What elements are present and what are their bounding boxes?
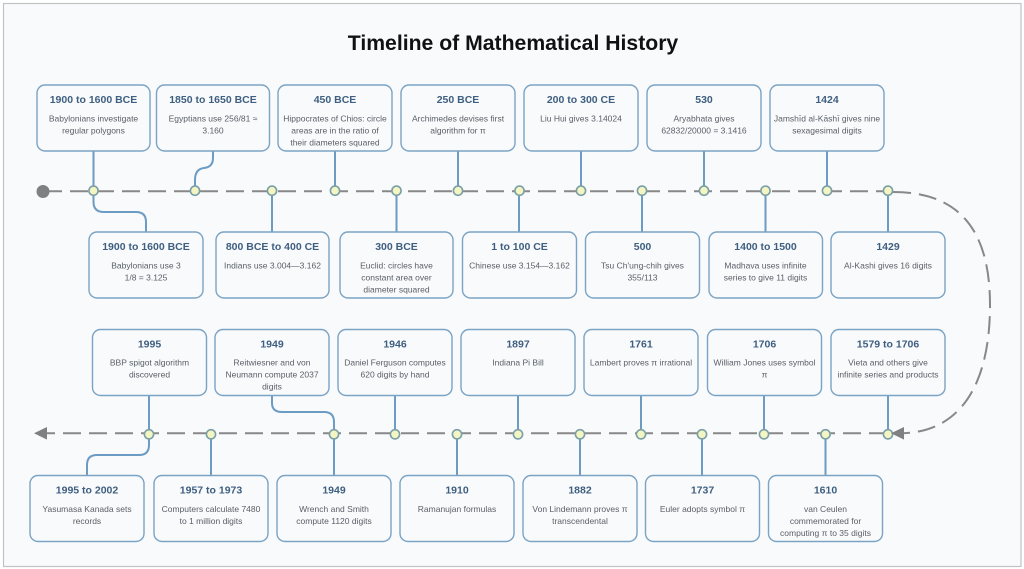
card: 1900 to 1600 BCE 3.125: 1900 to 1600 BCE [102, 241, 190, 253]
card: 800 BCE to 400 CE: 800 BCE to 400 CE [226, 241, 319, 253]
card: 1949 Reitwiesner: 1949 [260, 338, 284, 350]
card: 200 to 300 CE: Liu Hui gives 3.14024 [540, 114, 622, 124]
card: 1882: Von Lindemann proves π [532, 504, 628, 514]
card: 300 BCE: diameter squared [363, 284, 430, 294]
card: 450 BCE: areas are in the ratio of [291, 126, 379, 136]
card: 200 to 300 CE [524, 85, 638, 151]
card: 1610: computing π to 35 digits [780, 528, 871, 538]
card: 450 BCE: their diameters squared [290, 138, 380, 148]
card: 1949 Reitwiesner: Reitwiesner and von [233, 358, 311, 368]
card: 500: 355/113 [627, 272, 658, 282]
card: 1579 to 1706: Vieta and others give [848, 358, 928, 368]
card: 1949 Reitwiesner: digits [262, 382, 282, 392]
card: 450 BCE: Hippocrates of Chios: circle [283, 114, 387, 124]
card: 1429: 1429 [876, 241, 900, 253]
card: 530 [647, 85, 761, 151]
card: 1900 to 1600 BCE polygons: Babylonians investigate [49, 114, 138, 124]
card: 1995 BBP [92, 330, 206, 396]
card: 1910: 1910 [445, 484, 469, 496]
card: 1995 BBP: 1995 [138, 338, 161, 350]
card: 1400 to 1500: 1400 to 1500 [734, 241, 797, 253]
card: 250 BCE [401, 85, 515, 151]
card: 500: Tsu Ch'ung-chih gives [601, 260, 684, 270]
card: 1610 [768, 476, 882, 542]
card: 1946: Daniel Ferguson computes [344, 358, 446, 368]
card: 1900 to 1600 BCE 3.125: 1/8 = 3.125 [125, 272, 168, 282]
card: 1429 [831, 232, 945, 298]
card: 300 BCE: 300 BCE [375, 241, 418, 253]
card: 1429: Al-Kashi gives 16 digits [844, 260, 932, 270]
card: 1900 to 1600 BCE polygons: regular polygons [62, 126, 125, 136]
card: 1706: 1706 [753, 338, 776, 350]
card: 250 BCE: algorithm for π [430, 126, 486, 136]
card: 1900 to 1600 BCE polygons: 1900 to 1600 BCE [50, 94, 137, 106]
card: 1706: William Jones uses symbol [713, 358, 816, 368]
curved turn line [893, 192, 990, 433]
start marker [36, 185, 50, 198]
card: 200 to 300 CE: 200 to 300 CE [547, 94, 615, 106]
card: 530: 62832/20000 = 3.1416 [661, 126, 747, 136]
card: 1949 Reitwiesner [215, 330, 329, 396]
card: 800 BCE to 400 CE [216, 232, 329, 298]
card: 1761 [584, 330, 698, 396]
card: 1850 to 1650 BCE [156, 85, 270, 151]
card: 1995 BBP: BBP spigot algorithm [110, 358, 189, 368]
card: 300 BCE: Euclid: circles have [360, 260, 433, 270]
card: 1900 to 1600 BCE 3.125 [89, 232, 203, 298]
card: 1897: Indiana Pi Bill [492, 358, 544, 368]
card: 1424: 1424 [815, 94, 839, 106]
card: 1850 to 1650 BCE: 1850 to 1650 BCE [169, 94, 257, 106]
card: 1949 Wrench [277, 476, 391, 542]
card: 500: 500 [634, 241, 651, 253]
card: 1882 [523, 476, 637, 542]
timeline dots [89, 186, 893, 439]
card: 1957 to 1973: 1957 to 1973 [180, 484, 242, 496]
card: 1424: sexagesimal digits [792, 126, 862, 136]
card: 1400 to 1500: series to give 11 digits [724, 272, 807, 282]
card: 1995 to 2002: Yasumasa Kanada sets [42, 504, 132, 514]
card: 300 BCE [340, 232, 453, 298]
card: 1 to 100 CE: 1 to 100 CE [491, 241, 548, 253]
card: 1 to 100 CE [462, 232, 576, 298]
card: 300 BCE: constant area over [361, 272, 432, 282]
card: 450 BCE [278, 85, 392, 151]
card: 530: Aryabhata gives [674, 114, 734, 124]
card: 1949 Wrench: 1949 [322, 484, 346, 496]
card: 1949 Wrench: Wrench and Smith [299, 504, 369, 514]
card: 1706 [708, 330, 822, 396]
card: 1957 to 1973: to 1 million digits [180, 516, 242, 526]
card: 1579 to 1706 [831, 330, 945, 396]
lower timeline line [46, 432, 887, 434]
card: 1850 to 1650 BCE: 3.160 [202, 126, 224, 136]
card: 1610: van Ceulen [804, 504, 847, 514]
card: 1946: 1946 [383, 338, 407, 350]
card: 1 to 100 CE: Chinese use 3.154—3.162 [469, 260, 570, 270]
card: 250 BCE: 250 BCE [437, 94, 479, 106]
card: 1850 to 1650 BCE: Egyptians use 256/81 ≈ [169, 114, 258, 124]
card: 1957 to 1973 [154, 476, 268, 542]
arrow: right turn into lower line [891, 427, 904, 440]
card: 1900 to 1600 BCE polygons [37, 85, 150, 151]
card: 1882: 1882 [568, 484, 592, 496]
card: 1910: Ramanujan formulas [418, 504, 496, 514]
card: 1737: Euler adopts symbol π [660, 504, 745, 514]
card: 1424: Jamshīd al-Kāshī gives nine [774, 114, 880, 124]
card: 800 BCE to 400 CE: Indians use 3.004—3.162 [224, 260, 321, 270]
card: 1995 BBP: discovered [129, 370, 170, 380]
card: 250 BCE: Archimedes devises first [412, 114, 505, 124]
card: 1900 to 1600 BCE 3.125: Babylonians use 3 [111, 260, 181, 270]
card: 1949 Reitwiesner: Neumann compute 2037 [225, 370, 319, 380]
card: 1706: π [762, 370, 768, 380]
card: 1957 to 1973: Computers calculate 7480 [162, 504, 261, 514]
card: 1946: 620 digits by hand [360, 370, 430, 380]
card: 1995 to 2002: 1995 to 2002 [56, 484, 118, 496]
card: 1910 [400, 476, 514, 542]
card: 500 [586, 232, 700, 298]
card: 1424 [770, 85, 884, 151]
connectors [87, 151, 888, 475]
card: 450 BCE: 450 BCE [314, 94, 356, 106]
card: 1761: Lambert proves π irrational [590, 358, 692, 368]
card: 1400 to 1500 [709, 232, 822, 298]
card: 1610: commemorated for [790, 516, 861, 526]
card: 1761: 1761 [629, 338, 653, 350]
title: Timeline of Mathematical History [348, 32, 678, 55]
card: 1946 [338, 330, 452, 396]
card: 1579 to 1706: 1579 to 1706 [857, 338, 919, 350]
arrow: left end [34, 427, 47, 440]
card: 1579 to 1706: infinite series and products [837, 370, 939, 380]
card: 530: 530 [695, 94, 713, 106]
card: 1737 [646, 476, 760, 542]
card: 1882: transcendental [552, 516, 608, 526]
upper timeline line [44, 190, 887, 192]
card: 1897 [461, 330, 575, 396]
card: 1995 to 2002: records [73, 516, 101, 526]
card: 1400 to 1500: Madhava uses infinite [724, 260, 807, 270]
card: 1897: 1897 [506, 338, 530, 350]
card: 1610: 1610 [814, 484, 837, 496]
card: 1995 to 2002 [30, 476, 144, 542]
card: 1949 Wrench: compute 1120 digits [296, 516, 372, 526]
card: 1737: 1737 [691, 484, 714, 496]
